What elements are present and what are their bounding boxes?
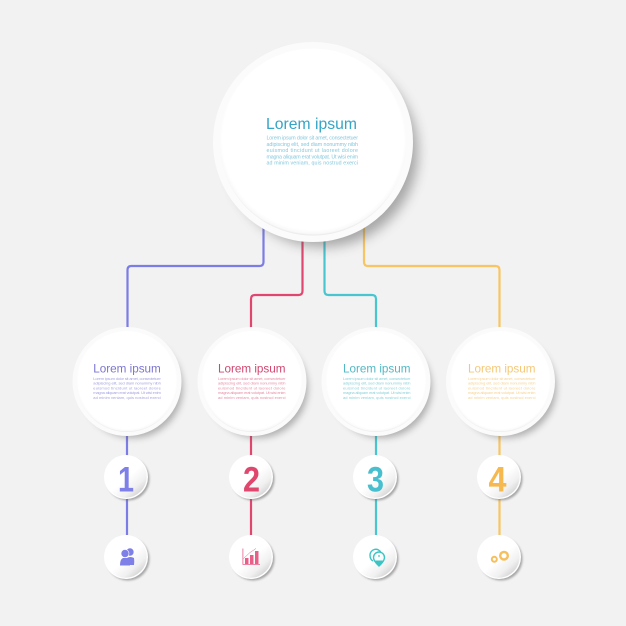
main body text: magna aliquam erat volutpat. Ut wisi enim (266, 154, 359, 160)
circle 2 body text: adipiscing elit, sed diam nonummy nibh (218, 381, 286, 386)
number badge 1: 1 (118, 460, 134, 500)
connector: red, main circle to circle 2 (251, 235, 302, 335)
circle 3 body text: adipiscing elit, sed diam nonummy nibh (343, 381, 410, 386)
circle 1 body text: Lorem ipsum dolor sit amet, consectetuer (93, 376, 161, 381)
connector: yellow, circle 4 to badges (498, 430, 501, 535)
circle 2 body text (218, 376, 286, 400)
circle 4 body text (468, 376, 536, 400)
number badge 2: 2 (243, 460, 260, 500)
circle 1 body text: magna aliquam erat volutpat. Ut wisi enim (93, 390, 161, 395)
number badge 4 (477, 455, 522, 500)
circle 1 (72, 327, 183, 438)
number badge 1 (104, 455, 150, 500)
connector: blue, main circle to circle 1 (128, 225, 264, 335)
circle 4 body text: magna aliquam erat volutpat. Ut wisi enim (468, 390, 536, 395)
number badge 2 (229, 455, 274, 500)
icon badge: bar chart (229, 535, 274, 580)
circle 2 (198, 327, 308, 438)
circle 2 body text: euismod tincidunt ut laoreet dolore (218, 385, 286, 390)
main body text: ad minim veniam, quis nostrud exerci (266, 161, 358, 167)
number badge 3 (353, 455, 398, 500)
main body text: euismod tincidunt ut laoreet dolore (266, 148, 358, 154)
circle 4 body text: ad minim veniam, quis nostrud exerci (468, 395, 536, 400)
circle 1 body text (93, 376, 162, 400)
circle 4 body text: euismod tincidunt ut laoreet dolore (468, 385, 536, 390)
icon badge: location pins (353, 535, 398, 580)
circle 1 body text: adipiscing elit, sed diam nonummy nibh (93, 381, 161, 386)
connector: teal, circle 3 to badges (375, 430, 377, 535)
circle 3 body text (343, 376, 411, 400)
circle 2 heading: Lorem ipsum (218, 362, 286, 375)
main heading: Lorem ipsum (266, 116, 357, 133)
circle 4 body text: adipiscing elit, sed diam nonummy nibh (468, 381, 536, 386)
circle 1 heading: Lorem ipsum (93, 362, 161, 375)
connector: blue, circle 1 to badges (126, 430, 128, 535)
circle 4 body text: Lorem ipsum dolor sit amet, consectetuer (468, 376, 536, 381)
circle 3 body text: ad minim veniam, quis nostrud exerci (343, 395, 411, 400)
main body text: adipiscing elit, sed diam nonummy nibh (266, 142, 358, 148)
circle 4 heading: Lorem ipsum (468, 362, 536, 375)
main body text (266, 136, 359, 167)
main body text: Lorem ipsum dolor sit amet, consectetuer (266, 136, 358, 142)
circle 3 body text: euismod tincidunt ut laoreet dolore (343, 385, 411, 390)
main circle (213, 42, 418, 247)
icon badge: gears (477, 535, 522, 580)
circle 4 (446, 327, 556, 438)
circle 2 body text: ad minim veniam, quis nostrud exerci (218, 395, 286, 400)
circle 1 body text: ad minim veniam, quis nostrud exerci (93, 395, 161, 400)
circle 1 body text: euismod tincidunt ut laoreet dolore (93, 385, 162, 390)
circle 3 (322, 327, 432, 438)
number badge 3: 3 (367, 460, 384, 500)
connector: teal, main circle to circle 3 (324, 235, 376, 335)
circle 2 body text: Lorem ipsum dolor sit amet, consectetuer (218, 376, 286, 381)
connector: yellow, main circle to circle 4 (364, 225, 500, 335)
circle 3 body text: Lorem ipsum dolor sit amet, consectetuer (343, 376, 411, 381)
circle 3 heading: Lorem ipsum (343, 362, 410, 375)
icon badge: people (104, 535, 150, 580)
number badge 4: 4 (488, 460, 507, 500)
connector: red, circle 2 to badges (250, 430, 252, 535)
circle 2 body text: magna aliquam erat volutpat. Ut wisi enim (218, 390, 286, 395)
circle 3 body text: magna aliquam erat volutpat. Ut wisi enim (343, 390, 411, 395)
